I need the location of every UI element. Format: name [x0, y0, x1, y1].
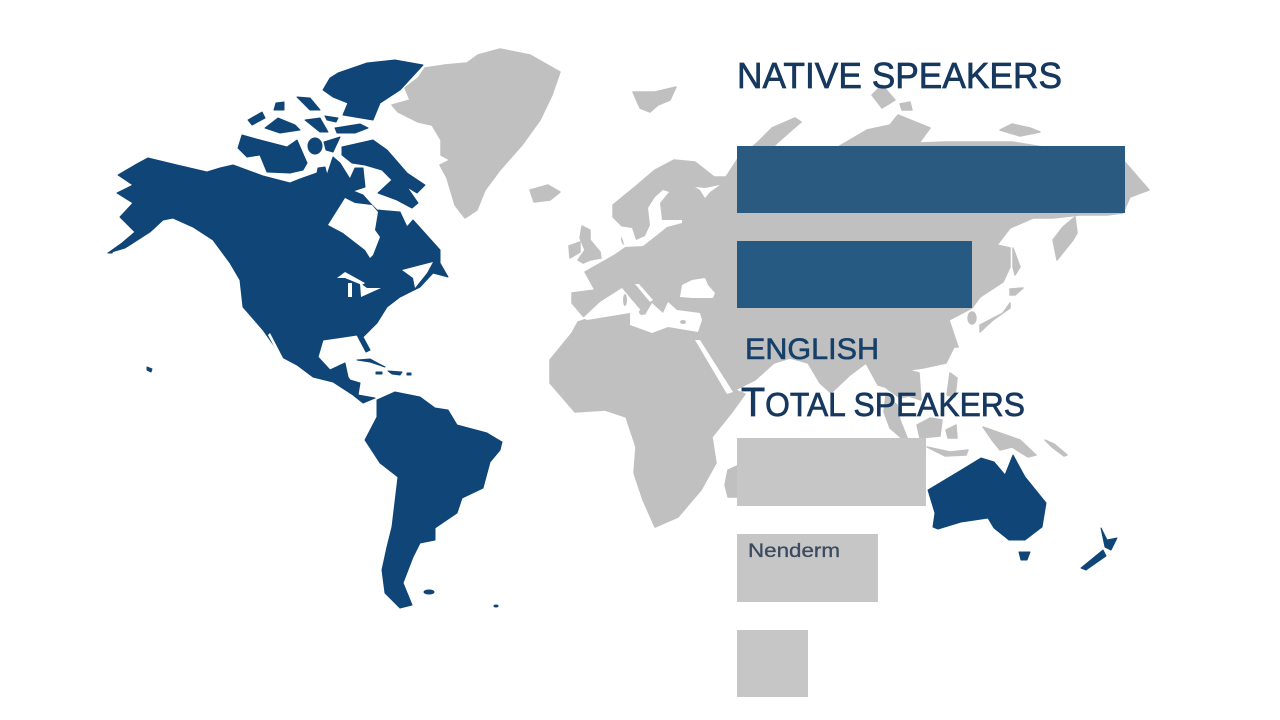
bar: total speakers second — [737, 534, 878, 602]
Lake Huron and Erie — [360, 283, 381, 297]
United Kingdom — [578, 226, 601, 263]
Hokkaido — [1010, 288, 1023, 295]
Hawaii — [147, 367, 152, 372]
world map — [108, 49, 1149, 608]
bar: native speakers second — [737, 241, 972, 308]
Adriatic sea — [635, 284, 653, 302]
South America — [365, 392, 502, 608]
Aleutian islands — [108, 251, 113, 253]
seas cut from the grey land — [583, 185, 733, 394]
Denmark — [621, 233, 629, 245]
Arctic Russian islands — [872, 85, 895, 108]
Caribbean islands — [357, 359, 385, 367]
label: English: ENGLISH — [745, 333, 879, 366]
bar: native speakers first — [737, 146, 1125, 213]
map: blue English-speaking regions — [108, 60, 1117, 608]
bar: total speakers third — [737, 630, 808, 697]
Honshu — [980, 303, 1010, 332]
Gulf of St Lawrence — [402, 262, 433, 288]
lakes and inland seas — [268, 198, 433, 358]
New Guinea — [983, 427, 1036, 457]
Iceland — [530, 185, 560, 202]
Baffin Island — [342, 140, 425, 208]
Ireland — [569, 242, 580, 258]
Korea — [968, 312, 976, 324]
Falkland Islands — [424, 590, 434, 594]
Ellesmere Island — [323, 60, 423, 120]
South Georgia — [494, 605, 498, 607]
Mediterranean islands — [623, 294, 686, 324]
Sulawesi — [946, 425, 957, 438]
Australia — [928, 455, 1046, 540]
Borneo — [917, 418, 942, 438]
North America — [108, 157, 448, 403]
Victoria Island — [238, 135, 307, 173]
native speakers bars — [737, 146, 1125, 308]
total speakers bars — [737, 438, 926, 697]
heading: native speakers: NATIVE SPEAKERS — [737, 55, 1062, 96]
New Zealand — [1101, 528, 1117, 550]
Queen Elizabeth Islands — [248, 112, 265, 125]
Philippines — [947, 373, 957, 397]
Madagascar — [725, 466, 737, 497]
Kamchatka — [1053, 217, 1077, 260]
Lake Michigan — [348, 283, 352, 297]
Java — [927, 447, 968, 456]
Red sea — [695, 340, 733, 394]
map: grey landmasses — [392, 49, 1149, 527]
Mediterranean sea — [583, 288, 702, 333]
Sakhalin — [1013, 248, 1020, 275]
Baltic sea — [618, 190, 682, 247]
White sea — [695, 185, 720, 198]
Greenland — [392, 49, 560, 218]
Pacific islands — [1045, 440, 1067, 456]
Tasmania — [1019, 552, 1030, 560]
Svalbard — [633, 87, 676, 112]
Black sea — [680, 278, 715, 298]
Lake Superior — [337, 272, 365, 285]
Malay peninsula — [884, 395, 908, 440]
heading: total speakers: TOTAL SPEAKERS — [741, 379, 1025, 425]
label: Nenderm: Nenderm — [748, 541, 840, 562]
Gulf of California — [268, 333, 283, 358]
Eurasia and Africa — [550, 115, 1149, 527]
Hudson Bay — [328, 198, 380, 258]
bar: total speakers first — [737, 438, 926, 506]
